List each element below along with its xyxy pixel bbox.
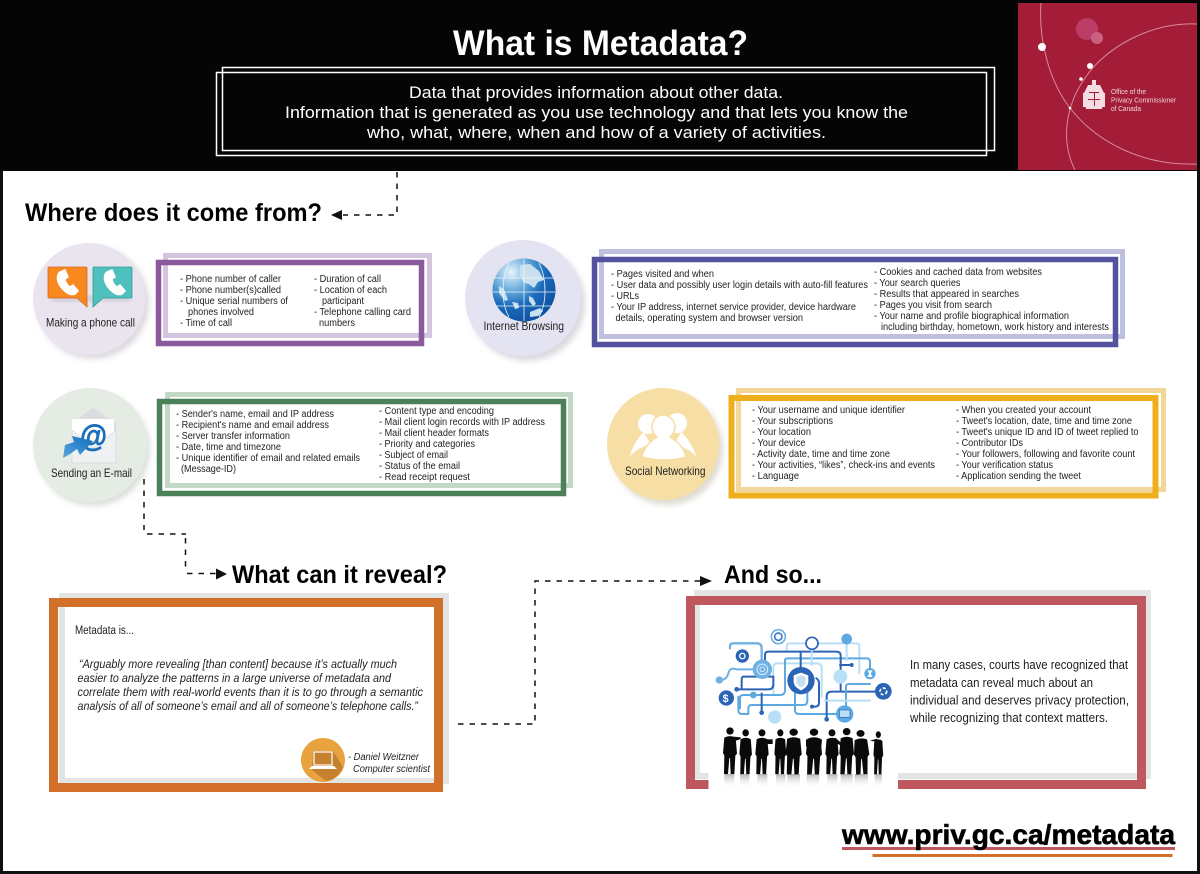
- icon circle: sending an e-mail: Sending an E-mail: [51, 466, 132, 480]
- quote: [78, 659, 423, 713]
- logo text: of Canada: [1111, 106, 1141, 113]
- list: column 1: - Your activities, “likes”, check-ins and events: [752, 460, 935, 471]
- icon circle: social networking: Social Networking: [625, 464, 706, 478]
- definition box: Information that is generated as you use technology and that lets you know the: [285, 104, 908, 122]
- icon: laptop: [301, 738, 345, 782]
- list: column 2: including birthday, hometown, work history and interests: [881, 322, 1109, 333]
- list: column 1: - Phone number of caller: [180, 274, 282, 285]
- icon: coat of arms: [1083, 80, 1105, 109]
- icon circle: social networking: [607, 388, 723, 505]
- list: column 2: - Priority and categories: [379, 439, 475, 450]
- list: column 1: phones involved: [188, 307, 254, 318]
- list: column 1: - Date, time and timezone: [176, 442, 281, 453]
- illustration: security network diagram: $: [723, 693, 729, 705]
- list: column 1: - Time of call: [180, 318, 232, 329]
- icon circle: internet browsing: [465, 240, 585, 361]
- list: column 1: - Your device: [752, 438, 806, 449]
- icon: globe: [492, 258, 556, 322]
- list: column 2: - Content type and encoding: [379, 406, 494, 417]
- text: conclusion: individual and deserves privacy protection,: [910, 692, 1129, 708]
- logo text: Office of the: [1111, 89, 1146, 96]
- icon: orange phone bubble: [48, 267, 87, 307]
- icon: three people: [630, 413, 696, 460]
- icon: envelope: [72, 408, 116, 463]
- list: column 1: - Your username and unique identifier: [752, 405, 906, 416]
- list: column 1: details, operating system and browser version: [616, 313, 803, 324]
- list: column 2: - Read receipt request: [379, 472, 470, 483]
- list: column 2: - Results that appeared in searches: [874, 289, 1019, 300]
- icon: at sign: @: [80, 418, 107, 453]
- logo panel: Office of the Privacy Commissioner: [1018, 3, 1197, 170]
- list: column 2: - Mail client login records with IP address: [379, 417, 545, 428]
- panel: internet browsing metadata: [594, 252, 1122, 344]
- arrow: e-mail to what can it reveal: [144, 479, 227, 580]
- text: conclusion: In many cases, courts have recognized that: [910, 657, 1128, 672]
- definition box: Data that provides information about other data.: [409, 84, 783, 102]
- attribution: Computer scientist: [353, 764, 431, 775]
- list: column 1: - User data and possibly user login details with auto-fill features: [611, 280, 868, 291]
- list: column 2: participant: [322, 296, 364, 307]
- list: column 2: numbers: [319, 318, 355, 329]
- list: column 2: [314, 274, 411, 329]
- website url: www.priv.gc.ca/metadata: [841, 819, 1175, 850]
- icon circle: internet browsing: Internet Browsing: [484, 319, 564, 333]
- panel: social networking metadata: [732, 390, 1164, 496]
- list: column 1: - Language: [752, 471, 799, 482]
- panel: what can it reveal quote: [54, 596, 446, 788]
- list: column 1: - Sender's name, email and IP address: [176, 409, 334, 420]
- panel: and so conclusion: [690, 593, 1148, 790]
- list: column 2: - Tweet's unique ID and ID of tweet replied to: [956, 427, 1139, 438]
- list: column 2: - Mail client header formats: [379, 428, 489, 439]
- header band: [0, 0, 1200, 171]
- logo text: Privacy Commissioner: [1111, 98, 1177, 104]
- arrow: reveal to and so: [458, 576, 712, 724]
- quote: correlate them with real-world events than it is to go through a semantic: [78, 687, 423, 699]
- list: column 2: - Your name and profile biographical information: [874, 311, 1069, 322]
- illustration: security network diagram: [716, 630, 892, 724]
- list: column 2: - Tweet's location, date, time and time zone: [956, 416, 1132, 427]
- heading: where does it come from: Where does it come from?: [25, 199, 322, 227]
- list: column 1: (Message-ID): [181, 464, 236, 475]
- icon circle: making a phone call: [33, 243, 149, 359]
- definition box: [216, 68, 994, 156]
- list: column 1: - URLs: [611, 291, 639, 302]
- list: column 1: - Your subscriptions: [752, 416, 833, 427]
- list: column 1: [752, 405, 935, 482]
- attribution: - Daniel Weitzner: [348, 752, 420, 763]
- title: What is Metadata?: [453, 24, 748, 63]
- list: column 1: [176, 409, 360, 475]
- list: column 2: - Subject of email: [379, 450, 448, 461]
- list: column 1: - Your location: [752, 427, 811, 438]
- list: column 2: - When you created your account: [956, 405, 1091, 416]
- list: column 1: - Server transfer information: [176, 431, 290, 442]
- list: column 2: [874, 267, 1109, 333]
- list: column 2: - Duration of call: [314, 274, 381, 285]
- list: column 2: - Telephone calling card: [314, 307, 411, 318]
- logo text: [1111, 89, 1177, 113]
- panel: phone call metadata: [158, 256, 430, 344]
- icon: teal phone bubble: [93, 267, 132, 307]
- text: conclusion: [909, 657, 1129, 725]
- list: column 2: - Your followers, following and favorite count: [956, 449, 1135, 460]
- heading: and so: And so...: [724, 561, 822, 589]
- list: column 1: - Unique serial numbers of: [180, 296, 288, 307]
- text: conclusion: metadata can reveal much about an: [910, 675, 1093, 690]
- list: column 2: - Your search queries: [874, 278, 960, 289]
- quote: “Arguably more revealing [than content] because it’s actually much: [79, 659, 397, 671]
- definition box: who, what, where, when and how of a variety of activities.: [366, 124, 826, 142]
- list: column 2: - Pages you visit from search: [874, 300, 992, 311]
- list: column 2: - Your verification status: [956, 460, 1053, 471]
- icon circle: making a phone call: Making a phone call: [46, 316, 135, 330]
- list: column 1: [611, 269, 868, 324]
- list: column 1: - Unique identifier of email and related emails: [176, 453, 360, 464]
- illustration: silhouettes of people: [723, 727, 883, 788]
- text: metadata is: Metadata is...: [75, 625, 134, 637]
- arrow: header to where does it come from: [331, 172, 397, 220]
- icon: blue arrow: [63, 436, 93, 458]
- heading: what can it reveal: What can it reveal?: [232, 561, 447, 589]
- text: conclusion: while recognizing that context matters.: [909, 710, 1108, 725]
- attribution: [348, 752, 431, 775]
- quote: easier to analyze the patterns in a large universe of metadata and: [78, 673, 392, 685]
- list: column 2: - Application sending the tweet: [956, 471, 1081, 482]
- list: column 1: [180, 274, 288, 329]
- list: column 2: - Cookies and cached data from websites: [874, 267, 1042, 278]
- icon circle: sending an e-mail: [33, 388, 150, 506]
- panel: e-mail metadata: [160, 394, 570, 494]
- quote: analysis of all of someone’s email and all of someone’s telephone calls.”: [78, 701, 419, 713]
- list: column 2: [379, 406, 545, 483]
- list: column 2: [956, 405, 1139, 482]
- list: column 1: - Your IP address, internet service provider, device hardware: [611, 302, 856, 313]
- list: column 2: - Contributor IDs: [956, 438, 1023, 449]
- list: column 1: - Phone number(s)called: [180, 285, 281, 296]
- list: column 1: - Recipient's name and email address: [176, 420, 329, 431]
- list: column 1: - Activity date, time and time zone: [752, 449, 890, 460]
- list: column 2: - Location of each: [314, 285, 387, 296]
- list: column 1: - Pages visited and when: [611, 269, 714, 280]
- list: column 2: - Status of the email: [379, 461, 460, 472]
